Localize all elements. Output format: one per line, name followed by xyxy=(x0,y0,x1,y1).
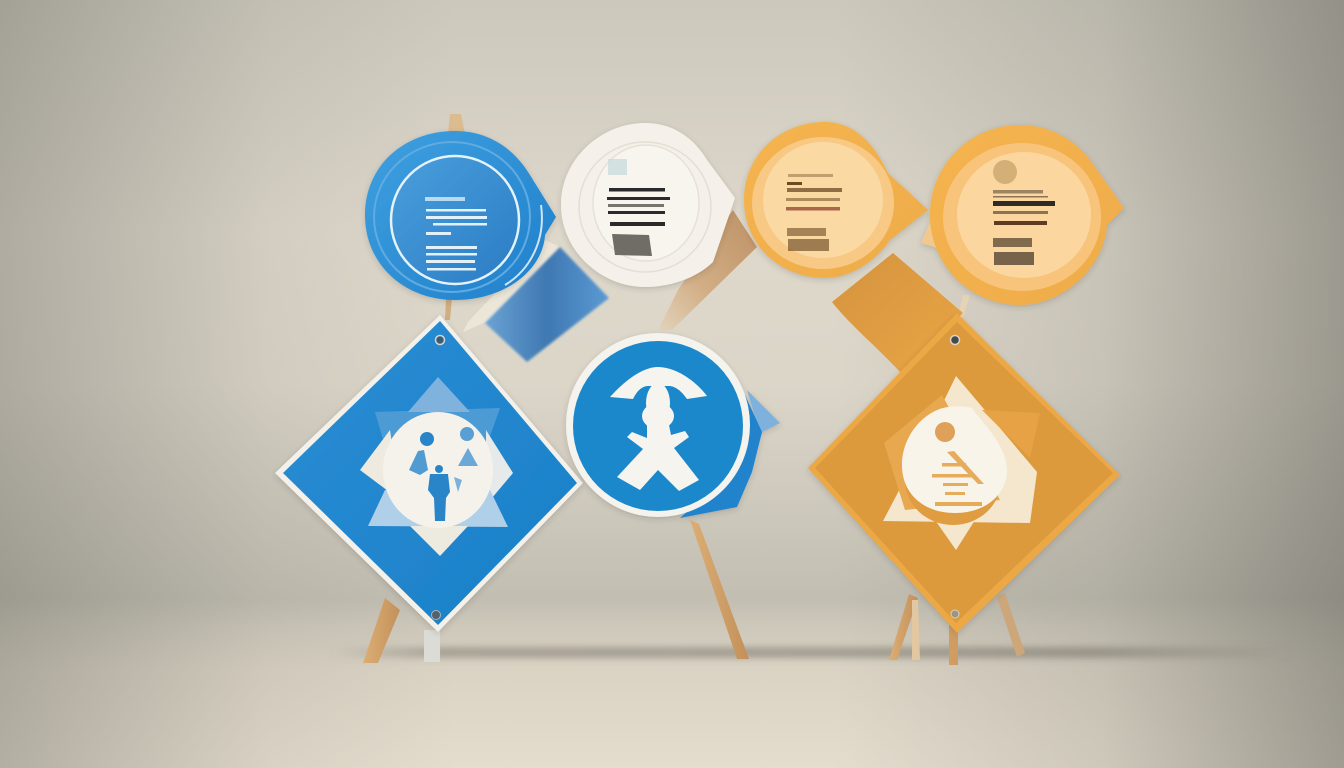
top sign 3: orange bubble xyxy=(744,122,928,278)
icon: drop figure xyxy=(932,422,984,506)
diamond sign: orange xyxy=(808,313,1120,633)
top sign 1: blue bubble xyxy=(365,131,556,300)
top sign 4: orange bubble xyxy=(921,125,1124,305)
star backing xyxy=(883,376,1040,550)
white drop xyxy=(902,406,1007,525)
text lines xyxy=(607,159,670,256)
circle sign: blue xyxy=(566,333,780,518)
white disc xyxy=(383,412,493,528)
icon: emblem xyxy=(993,160,1017,184)
ribbon: orange xyxy=(832,253,963,372)
icon: people xyxy=(409,427,478,521)
ribbon: cream strut xyxy=(463,240,560,332)
text lines xyxy=(425,197,487,270)
text lines xyxy=(786,174,842,251)
ribbon: blue xyxy=(485,247,609,362)
star backing xyxy=(360,377,513,556)
diamond sign: blue xyxy=(275,315,583,632)
wooden posts and legs xyxy=(363,114,1025,665)
connector ribbons xyxy=(463,210,963,372)
text lines xyxy=(993,190,1055,265)
icon: figure xyxy=(610,367,707,491)
ribbon: tan xyxy=(658,210,757,330)
top sign 2: white bubble xyxy=(561,123,735,287)
